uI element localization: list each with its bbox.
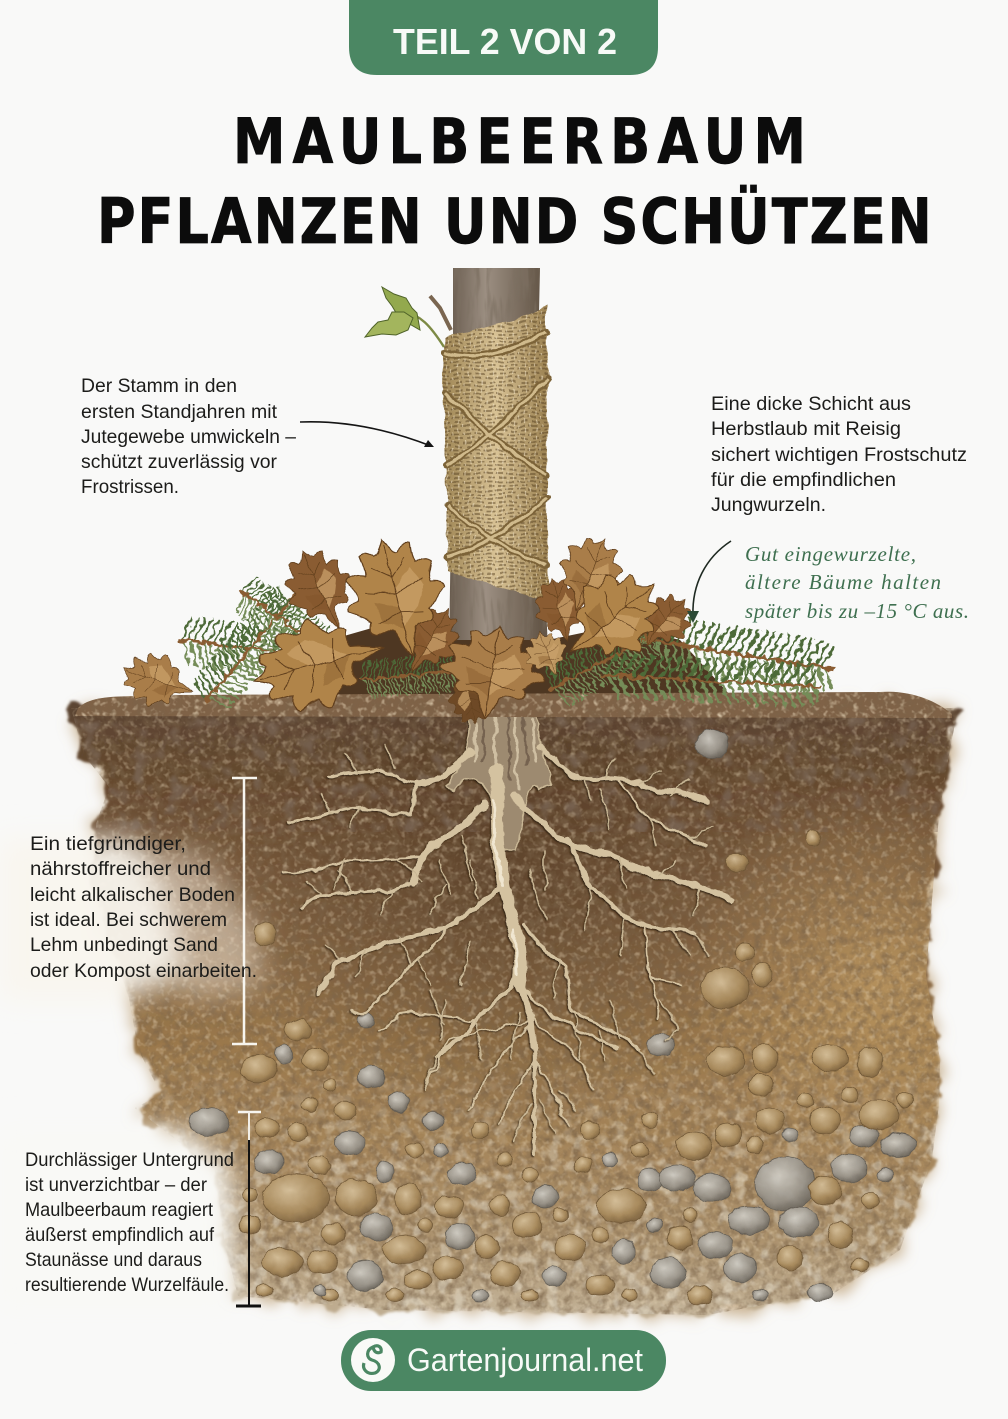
handwritten note: frost hardiness: ältere Bäume halten [745,570,941,594]
jute rope [445,332,547,565]
highlight on main roots [494,800,517,975]
fine rootlets [305,745,712,1140]
top banner: Teil 2 von 2: TEIL 2 VON 2 [393,21,617,62]
icon: young leaf sprig [365,287,451,347]
callout: trunk wrap [81,375,296,498]
jute wrap around trunk [443,306,550,602]
callout: drainage [25,1149,234,1296]
callout: trunk wrap: ersten Standjahren mit [81,401,278,423]
arrow: to mulch [687,541,731,623]
handwritten note: frost hardiness [745,542,969,623]
callout: trunk wrap: schützt zuverlässig vor [81,451,277,473]
icon: sprout logo [351,1338,395,1382]
callout: soil: nährstoffreicher und [30,858,211,880]
callout: trunk wrap: Jutegewebe umwickeln – [81,426,296,448]
handwritten note: frost hardiness: Gut eingewurzelte, [745,542,916,566]
callout: soil: oder Kompost einarbeiten. [30,960,257,982]
bracket: soil depth [232,778,257,1044]
mulch layer of leaves and fir twigs [70,526,960,728]
callout: leaf mulch: Herbstlaub mit Reisig [711,418,901,440]
callout: trunk wrap: Der Stamm in den [81,375,237,397]
handwritten note: frost hardiness: später bis zu –15 °C aus. [745,599,969,623]
footer logo pill [341,1330,666,1391]
title: PFLANZEN UND SCHÜTZEN [97,186,932,258]
callout: leaf mulch: Jungwurzeln. [711,494,826,516]
callout: leaf mulch: sichert wichtigen Frostschutz [711,444,967,466]
callout: drainage: äußerst empfindlich auf [25,1224,215,1246]
callout: soil: leicht alkalischer Boden [30,884,235,906]
callout: trunk wrap: Frostrissen. [81,476,179,498]
callout: drainage: ist unverzichtbar – der [25,1174,207,1196]
trunk [450,268,548,640]
callout: soil [30,833,257,982]
small pebbles [243,1079,913,1302]
callout: drainage: Durchlässiger Untergrund [25,1149,234,1171]
callout: soil: ist ideal. Bei schwerem [30,909,227,931]
root crown [448,708,552,850]
callout: drainage: Maulbeerbaum reagiert [25,1199,214,1221]
title: MAULBEERBAUM [233,106,806,178]
callout: drainage: resultierende Wurzelfäule. [25,1274,229,1296]
stones and gravel layer [189,729,916,1304]
pale halo behind soil text [0,838,262,1310]
top banner: Teil 2 von 2 [349,0,658,75]
arrow: to trunk wrap [300,422,434,447]
bracket: subsoil depth [236,1112,261,1306]
callout: leaf mulch [711,393,967,516]
callout: leaf mulch: für die empfindlichen [711,469,896,491]
callout: drainage: Staunässe und daraus [25,1249,202,1271]
title [97,106,932,258]
root system [283,708,733,1154]
callout: leaf mulch: Eine dicke Schicht aus [711,393,911,415]
soil cross-section [60,700,960,1330]
footer logo pill: Gartenjournal.net [407,1342,643,1378]
callout: soil: Lehm unbedingt Sand [30,934,218,956]
topsoil band [75,692,952,718]
fir twigs [175,573,838,717]
fallen leaves [114,526,703,728]
callout: soil: Ein tiefgründiger, [30,833,186,855]
